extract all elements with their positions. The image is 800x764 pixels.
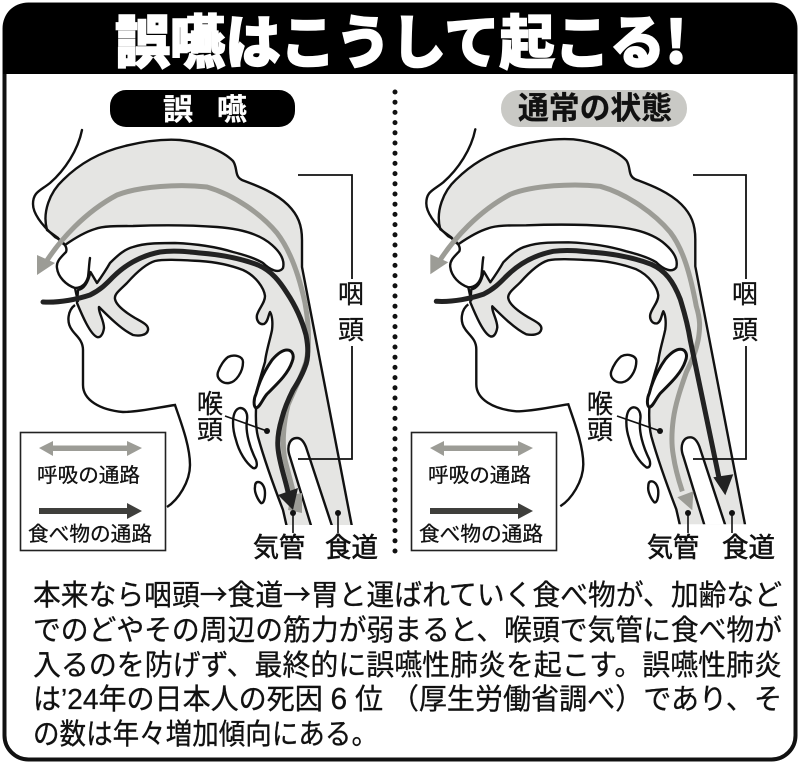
legend [412, 432, 556, 550]
trachea and esophagus labels: 食道 [722, 533, 775, 563]
pharynx label: 咽 [338, 279, 364, 309]
legend: 食べ物の通路 [28, 523, 152, 546]
trachea and esophagus labels [647, 510, 775, 563]
legend: 呼吸の通路 [428, 464, 531, 487]
trachea and esophagus labels: 気管 [253, 533, 305, 563]
legend: 呼吸の通路 [37, 464, 140, 487]
panel: aspiration [20, 90, 378, 563]
larynx label: 頭 [587, 415, 613, 445]
food path arrow: normal [436, 250, 733, 495]
legend [20, 432, 166, 550]
body text: は’24年の日本人の死因 6 位 （厚生労働省調べ）であり、そ [33, 681, 782, 716]
larynx label [197, 389, 270, 445]
larynx label: 喉 [197, 389, 223, 419]
pill heading: aspiration: 嚥 [217, 94, 247, 127]
panel: normal state [412, 90, 775, 563]
body text: の数は年々増加傾向にある。 [33, 718, 378, 751]
body text: でのどやその周辺の筋力が弱まると、喉頭で気管に食べ物が [33, 614, 782, 647]
pill heading: normal state: 通常の状態 [518, 91, 672, 126]
anatomy diagram: aspiration [33, 130, 353, 532]
body text: 本来なら咽頭→食道→胃と運ばれていく食べ物が、加齢など [33, 572, 782, 614]
pharynx label [693, 175, 758, 459]
title banner [3, 0, 797, 80]
air path arrow: aspiration [37, 186, 309, 513]
air path arrow: normal [430, 185, 700, 510]
food path arrow: aspiration [43, 251, 308, 510]
anatomy diagram: normal [426, 129, 746, 531]
pill heading: aspiration: 誤 [163, 94, 193, 127]
trachea and esophagus labels [253, 510, 378, 563]
trachea and esophagus labels: 気管 [647, 533, 699, 563]
pharynx label: 頭 [732, 315, 758, 345]
dotted divider [392, 92, 398, 552]
larynx label: 頭 [197, 415, 223, 445]
body text [33, 572, 782, 751]
pill heading: aspiration [110, 90, 295, 127]
pharynx label: 頭 [338, 315, 364, 345]
trachea and esophagus labels: 食道 [325, 533, 378, 563]
larynx label [587, 389, 663, 445]
pharynx label [298, 175, 364, 459]
body text: 入るのを防げず、最終的に誤嚥性肺炎を起こす。誤嚥性肺炎 [33, 649, 782, 682]
pharynx label: 咽 [732, 279, 758, 309]
legend: 食べ物の通路 [419, 523, 543, 546]
larynx label: 喉 [587, 389, 613, 419]
